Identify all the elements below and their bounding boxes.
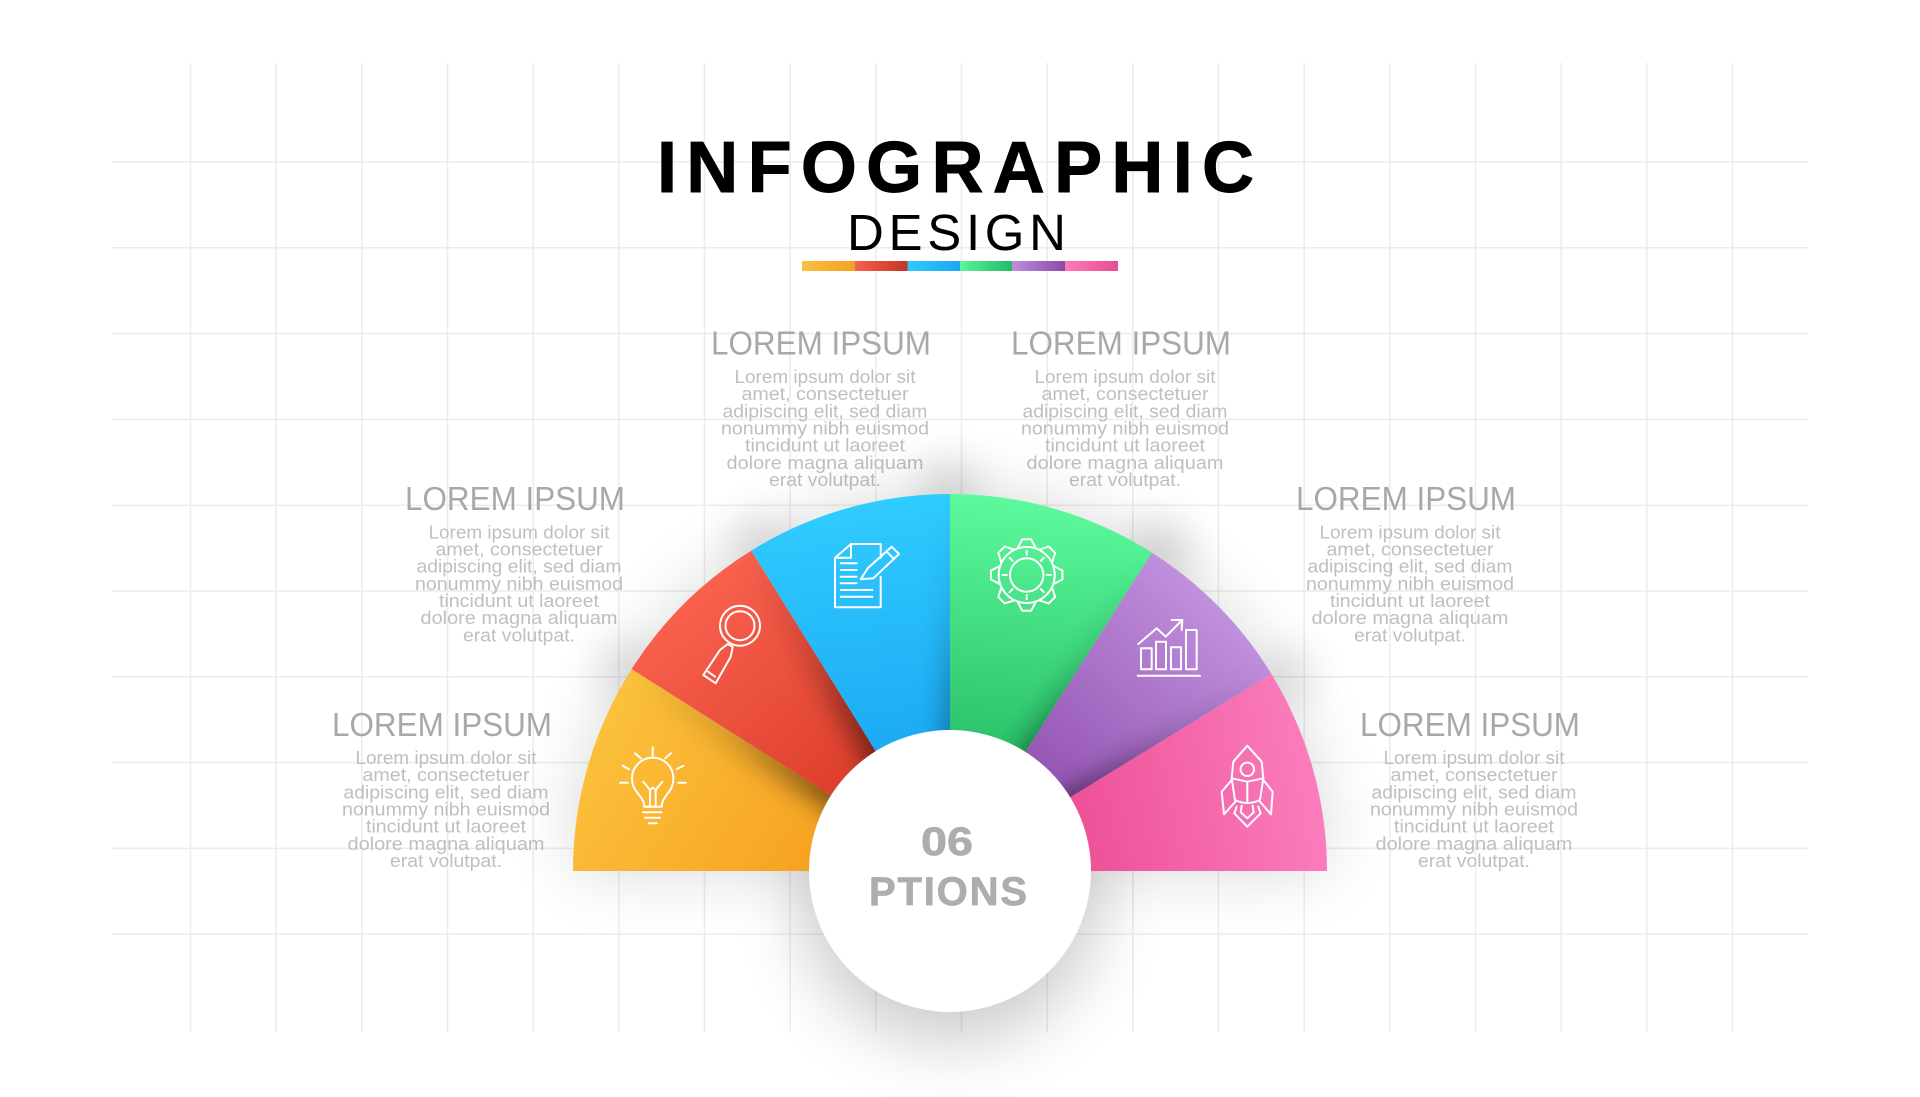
text block: option 3: dolore magna aliquam xyxy=(726,453,924,473)
text block: option 4: amet, consectetuer xyxy=(1042,384,1208,404)
title xyxy=(657,128,1254,271)
text block: option 5: LOREM IPSUM xyxy=(1296,480,1516,517)
icon: magnifier xyxy=(703,606,760,683)
icon: gear xyxy=(991,539,1062,611)
text block: option 4: LOREM IPSUM xyxy=(1011,325,1231,362)
text block: option 3: erat volutpat. xyxy=(769,470,881,490)
segment: purple xyxy=(1026,552,1272,798)
text block: option 2: tincidunt ut laoreet xyxy=(439,591,599,611)
text block: option 6: amet, consectetuer xyxy=(1390,765,1558,785)
text block: option 3: Lorem ipsum dolor sit xyxy=(734,367,916,387)
text block: option 2 xyxy=(405,480,625,645)
text block: option 6: adipiscing elit, sed diam xyxy=(1372,782,1576,802)
text block: option 4 xyxy=(1011,325,1231,490)
text block: option 1: LOREM IPSUM xyxy=(332,706,552,743)
text block: option 5: tincidunt ut laoreet xyxy=(1330,591,1490,611)
colour bar xyxy=(802,261,1118,271)
text block: option 1: Lorem ipsum dolor sit xyxy=(356,748,536,768)
text block: option 1: adipiscing elit, sed diam xyxy=(344,782,548,802)
text block: option 5: amet, consectetuer xyxy=(1326,540,1494,560)
text block: option 4: adipiscing elit, sed diam xyxy=(1022,401,1228,421)
text block: option 2: nonummy nibh euismod xyxy=(415,574,623,594)
drop shadows xyxy=(573,458,1327,1043)
icon: rocket xyxy=(1222,746,1273,827)
label: 06: 06 xyxy=(921,820,973,864)
text block: option 5: adipiscing elit, sed diam xyxy=(1308,557,1512,577)
segment: pink xyxy=(950,674,1327,871)
text block: option 3: nonummy nibh euismod xyxy=(721,418,929,438)
centre circle xyxy=(809,730,1091,1012)
text block: option 5 xyxy=(1296,480,1516,645)
text block: option 3: tincidunt ut laoreet xyxy=(745,436,905,456)
text block: option 3: LOREM IPSUM xyxy=(711,325,931,362)
text block: option 1: dolore magna aliquam xyxy=(348,834,544,854)
segment: green xyxy=(950,494,1152,752)
text block: option 3: amet, consectetuer xyxy=(742,384,908,404)
text block: option 1: tincidunt ut laoreet xyxy=(366,817,526,837)
text block: option 1: nonummy nibh euismod xyxy=(342,800,550,820)
text block: option 2: adipiscing elit, sed diam xyxy=(416,557,622,577)
text block: option 2: LOREM IPSUM xyxy=(405,480,625,517)
heading: design: DESIGN xyxy=(847,204,1066,261)
text block: option 6: erat volutpat. xyxy=(1418,851,1530,871)
text block: option 4: dolore magna aliquam xyxy=(1026,453,1224,473)
text block: option 5: dolore magna aliquam xyxy=(1312,608,1508,628)
text block: option 6 xyxy=(1360,706,1580,871)
text block: option 5: nonummy nibh euismod xyxy=(1306,574,1514,594)
text block: option 6: tincidunt ut laoreet xyxy=(1394,817,1554,837)
text block: option 2: amet, consectetuer xyxy=(436,540,602,560)
text block: option 1: erat volutpat. xyxy=(390,851,502,871)
segment: blue xyxy=(751,494,950,752)
text block: option 6: LOREM IPSUM xyxy=(1360,706,1580,743)
text block: option 2: Lorem ipsum dolor sit xyxy=(428,522,610,542)
text block: option 4: nonummy nibh euismod xyxy=(1021,418,1229,438)
text block: option 5: Lorem ipsum dolor sit xyxy=(1320,522,1500,542)
icon: growth chart xyxy=(1138,620,1200,676)
text block: option 6: nonummy nibh euismod xyxy=(1370,800,1578,820)
icon: document and pencil xyxy=(835,544,899,607)
heading: infographic: INFOGRAPHIC xyxy=(657,128,1254,208)
text block: option 3: adipiscing elit, sed diam xyxy=(722,401,928,421)
text block: option 3 xyxy=(711,325,931,490)
text block: option 4: Lorem ipsum dolor sit xyxy=(1034,367,1216,387)
segment: yellow xyxy=(573,669,831,871)
text block: option 1 xyxy=(332,706,552,871)
text block: option 2: dolore magna aliquam xyxy=(420,608,618,628)
text block: option 5: erat volutpat. xyxy=(1354,625,1466,645)
label: options: PTIONS xyxy=(869,870,1027,914)
text block: option 1: amet, consectetuer xyxy=(362,765,530,785)
text block: option 4: tincidunt ut laoreet xyxy=(1045,436,1205,456)
icon: light bulb xyxy=(620,747,686,823)
segment: red xyxy=(632,550,876,796)
text block: option 6: dolore magna aliquam xyxy=(1376,834,1572,854)
semicircle chart xyxy=(573,494,1327,871)
text block: option 2: erat volutpat. xyxy=(463,625,575,645)
text block: option 4: erat volutpat. xyxy=(1069,470,1181,490)
text block: option 6: Lorem ipsum dolor sit xyxy=(1384,748,1564,768)
